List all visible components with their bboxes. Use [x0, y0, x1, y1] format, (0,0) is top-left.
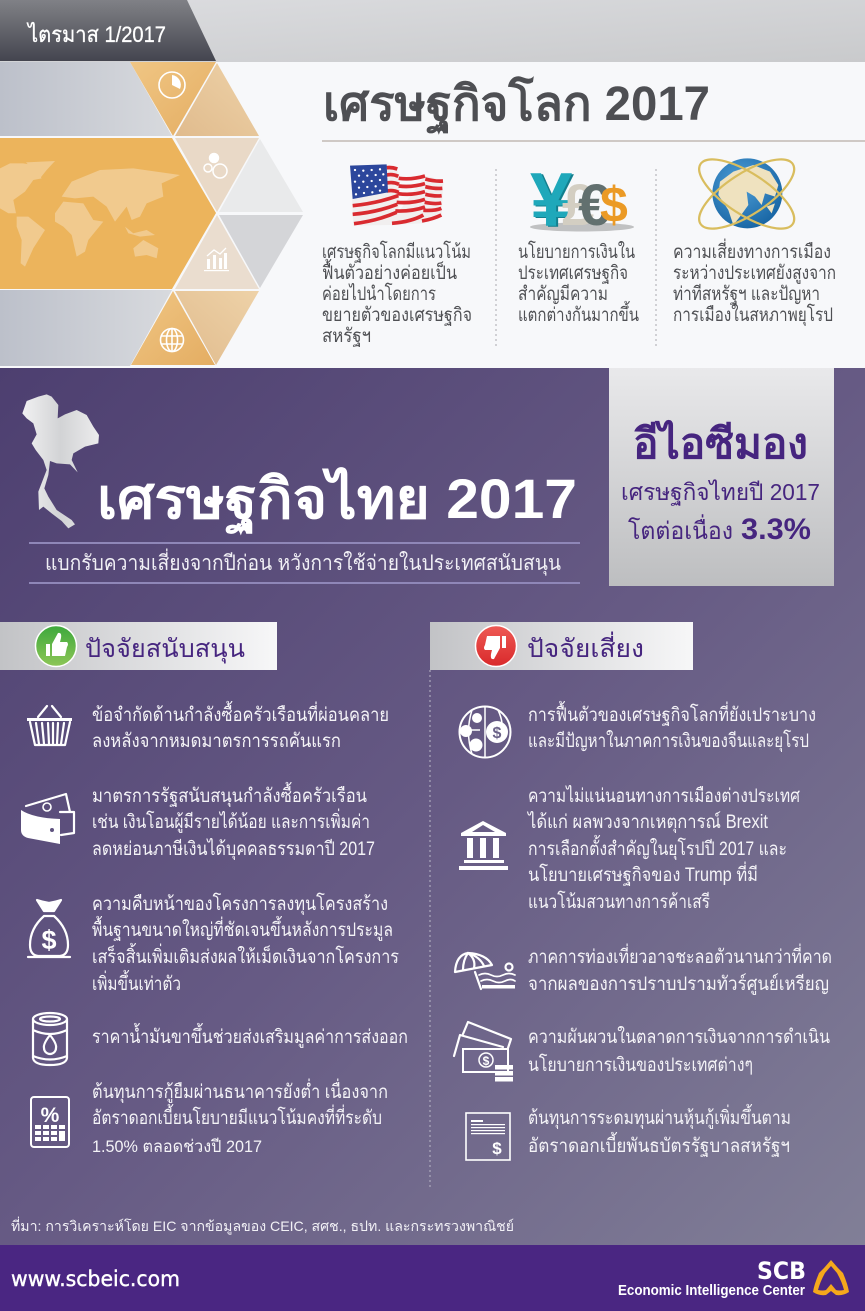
panel: world economy — [0, 62, 865, 368]
icon: globe with currencies: $ — [493, 725, 502, 742]
icon: SCB logo — [813, 1260, 849, 1295]
item: oil barrel — [33, 1013, 408, 1065]
icon: currency symbols: $ — [600, 177, 628, 233]
item: bond yields: ต้นทุนการระดมทุนผ่านหุ้นกู้เพิ่มขึ้นตาม — [528, 1104, 791, 1130]
icon: wallet — [21, 794, 74, 844]
item: global currency — [460, 701, 816, 758]
callout: EIC forecast: เศรษฐกิจไทยปี 2017 — [621, 479, 820, 506]
item: money bag: เพิ่มขึ้นเท่าตัว — [92, 970, 181, 995]
text: world point 1: ฟื้นตัวอย่างค่อยเป็น — [322, 259, 457, 284]
icon: bond document — [466, 1113, 510, 1160]
text: world point 2: สำคัญมีความ — [518, 283, 608, 305]
item: wallet: มาตรการรัฐสนับสนุนกำลังซื้อครัวเรือน — [92, 782, 367, 808]
item: politics: แนวโน้มสวนทางการค้าเสรี — [528, 890, 710, 913]
icon: currency symbols: € — [578, 173, 610, 238]
heading: Thai economy: เศรษฐกิจไทย 2017 — [97, 466, 577, 535]
icon: temple — [459, 821, 508, 870]
quarter label: ไตรมาส 1/2017 — [26, 22, 166, 47]
item: wallet — [21, 782, 375, 861]
text: world point 1: เศรษฐกิจโลกมีแนวโน้ม — [322, 240, 471, 263]
item: tourism: จากผลของการปราบปรามทัวร์ศูนย์เหรียญ — [528, 973, 829, 995]
text: world point 3: ท่าทีสหรัฐฯ และปัญหา — [673, 283, 820, 305]
text: world point 2: นโยบายการเงินใน — [518, 240, 635, 263]
icon: clock chart — [159, 72, 185, 98]
callout: EIC forecast — [609, 368, 834, 586]
item: money bag: พื้นฐานขนาดใหญ่ที่ชัดเจนขึ้นหลังการประมูล — [92, 916, 393, 941]
SCB wordmark: Economic Intelligence Center — [618, 1282, 805, 1299]
text: world point 2 — [518, 240, 639, 326]
item: wallet: เช่น เงินโอนผู้มีรายได้น้อย และการเพิ่มค่า — [92, 808, 370, 833]
icon: globe — [160, 328, 184, 352]
item: politics: ได้แก่ ผลพวงจากเหตุการณ์ Brexit — [526, 811, 769, 834]
text: world point 1: ค่อยไปนำโดยการ — [322, 282, 436, 305]
item: money bag — [28, 892, 399, 995]
icon: money bag: $ — [41, 925, 57, 955]
source note: ที่มา: การวิเคราะห์โดย EIC จากข้อมูลของ CEIC, สศช., ธปท. และกระทรวงพาณิชย์ — [11, 1217, 514, 1235]
text: world point 2: แตกต่างกันมากขึ้น — [518, 301, 639, 326]
item: politics: นโยบายเศรษฐกิจของ Trump ที่มี — [528, 861, 758, 886]
top band with quarter label — [0, 0, 865, 62]
text: world point 3: การเมืองในสหภาพยุโรป — [673, 303, 833, 327]
icon: beach umbrella — [455, 953, 515, 989]
website: www.scbeic.com — [11, 1267, 180, 1291]
icon: globe with currencies — [460, 706, 510, 758]
panel: Thai economy background — [0, 368, 865, 1245]
icon: thumbs up — [36, 626, 76, 666]
icon: Thailand map — [22, 394, 99, 528]
icon: currency symbols: ¥ — [532, 159, 574, 244]
item: tourism — [455, 943, 832, 995]
callout: EIC forecast: อีไอซีมอง — [633, 419, 808, 467]
hexagon graphic — [0, 62, 303, 366]
text: world point 1 — [322, 240, 472, 347]
icon: US flag — [350, 164, 443, 226]
icon: oil barrel — [33, 1013, 67, 1065]
text: world point 1: สหรัฐฯ — [322, 326, 371, 347]
icon: currency symbols: ¥ — [530, 158, 572, 243]
item: money bag: ความคืบหน้าของโครงการลงทุนโครงสร้าง — [92, 892, 388, 916]
item: politics: การเลือกตั้งสำคัญในยุโรปปี 2017 และ — [528, 835, 787, 861]
item: basket: ข้อจำกัดด้านกำลังซื้อครัวเรือนที่ผ่อนคลาย — [92, 701, 389, 726]
item: calculator — [31, 1078, 388, 1156]
icon: globe with orbits — [689, 147, 804, 241]
icon: currency symbols: £ — [562, 173, 594, 238]
icon: money bag — [28, 900, 70, 957]
icon: calculator: % — [41, 1104, 60, 1127]
item: politics — [459, 785, 800, 913]
icon: basket — [27, 706, 72, 745]
heading: world economy: เศรษฐกิจโลก 2017 — [323, 75, 710, 135]
icon: thumbs down — [476, 626, 516, 666]
callout: EIC forecast: 3.3% — [741, 513, 811, 546]
icon: bond document: $ — [492, 1139, 502, 1158]
item: politics: ความไม่แน่นอนทางการเมืองต่างประเทศ — [528, 785, 800, 807]
item: basket: ลงหลังจากหมดมาตรการรถคันแรก — [92, 731, 341, 752]
icon: cash stack — [454, 1022, 513, 1082]
subheading: แบกรับความเสี่ยงจากปีก่อน หวังการใช้จ่ายในประเทศสนับสนุน — [45, 548, 561, 576]
text: world point 1: ขยายตัวของเศรษฐกิจ — [322, 305, 472, 326]
tab: risk factors: ปัจจัยเสี่ยง — [527, 631, 644, 663]
item: bond yields: อัตราดอกเบี้ยพันธบัตรรัฐบาลสหรัฐฯ — [528, 1132, 790, 1157]
text: world point 3 — [673, 238, 836, 327]
text: world point 3: ความเสี่ยงทางการเมือง — [673, 238, 831, 263]
text: world point 2: ประเทศเศรษฐกิจ — [518, 263, 628, 284]
item: wallet: ลดหย่อนภาษีเงินได้บุคคลธรรมดาปี 2017 — [92, 838, 375, 861]
callout: EIC forecast: โตต่อเนื่อง — [628, 514, 733, 545]
item: bond yields — [466, 1104, 791, 1160]
item: financial volatility — [454, 1022, 830, 1082]
world map — [0, 161, 180, 267]
SCB wordmark: SCB — [757, 1257, 806, 1285]
icon: gears — [204, 154, 227, 178]
item: oil barrel: ราคาน้ำมันขาขึ้นช่วยส่งเสริมมูลค่าการส่งออก — [92, 1023, 408, 1048]
item: calculator: อัตราดอกเบี้ยนโยบายมีแนวโน้มคงที่ที่ระดับ — [92, 1104, 382, 1129]
icon: bar chart — [204, 248, 229, 271]
item: basket — [27, 701, 389, 752]
SCB wordmark — [618, 1257, 806, 1299]
item: global currency: การฟื้นตัวของเศรษฐกิจโลกที่ยังเปราะบาง — [528, 701, 816, 726]
tab: supporting factors: ปัจจัยสนับสนุน — [85, 635, 245, 664]
icon: cash stack: $ — [483, 1054, 490, 1068]
item: calculator: ต้นทุนการกู้ยืมผ่านธนาคารยังต่ำ เนื่องจาก — [92, 1078, 388, 1104]
tab: risk factors — [430, 622, 693, 670]
item: calculator: 1.50% ตลอดช่วงปี 2017 — [92, 1137, 262, 1156]
icon: calculator — [31, 1097, 69, 1147]
tab: supporting factors — [0, 622, 277, 670]
item: financial volatility: นโยบายการเงินของประเทศต่างๆ — [528, 1053, 753, 1076]
footer band — [0, 1245, 865, 1311]
icon: currency symbols — [530, 158, 634, 244]
item: money bag: เสร็จสิ้นเพิ่มเติมส่งผลให้เม็ดเงินจากโครงการ — [92, 943, 399, 968]
